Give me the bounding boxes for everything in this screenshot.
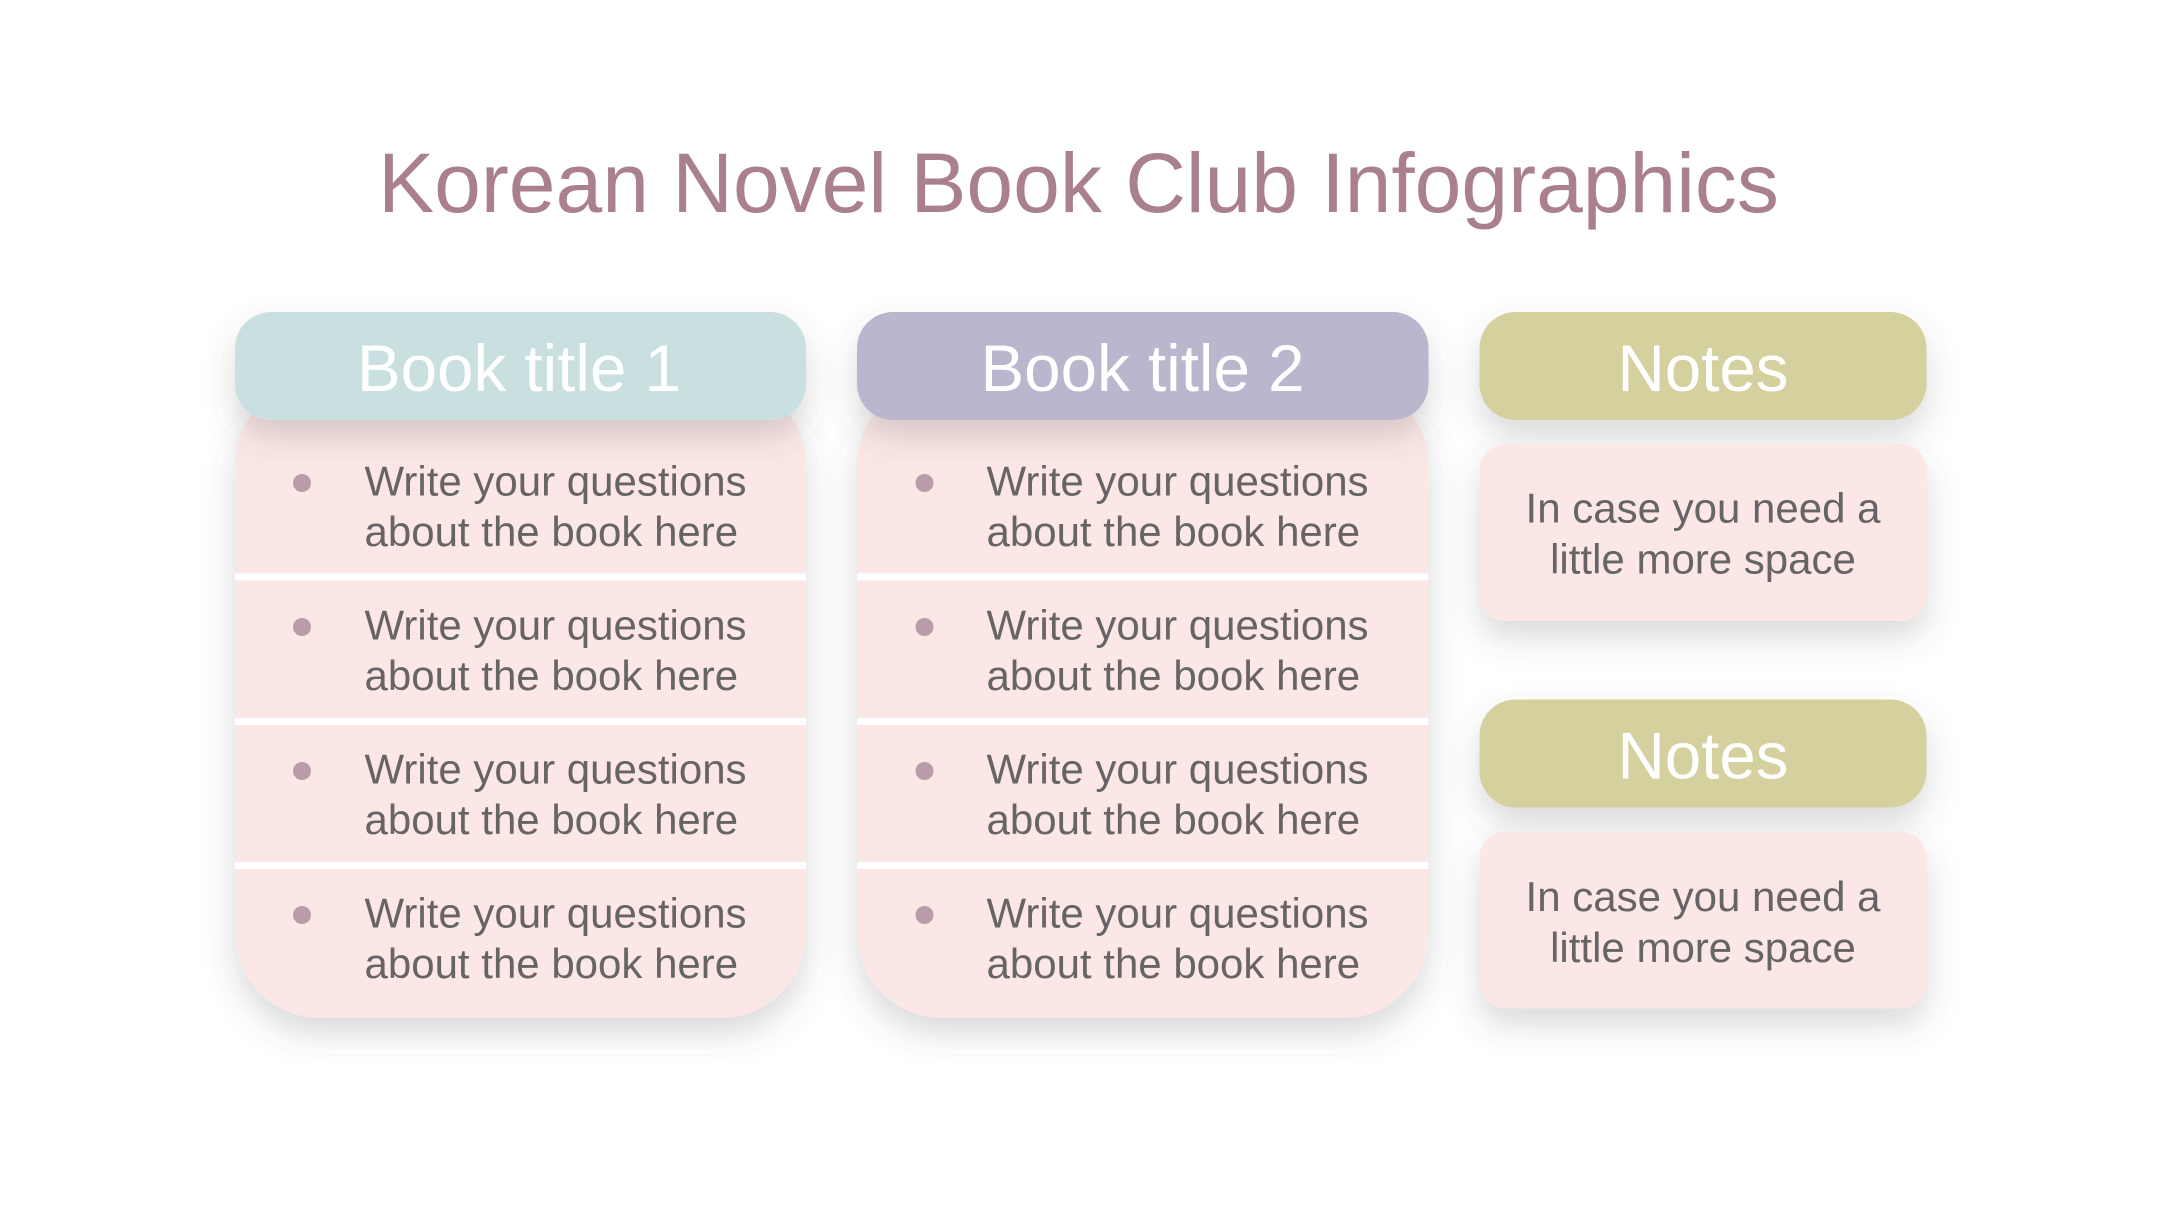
- question 2: about the book here: [364, 652, 738, 699]
- question 3: [916, 746, 1369, 843]
- question 4: about the book here: [364, 940, 738, 987]
- notes body: In case you need a: [1526, 484, 1881, 532]
- title: Korean Novel Book Club Infographics: [378, 136, 1779, 230]
- notes body: In case you need a: [1526, 873, 1881, 920]
- question 2: about the book here: [986, 652, 1360, 699]
- question 1: about the book here: [364, 508, 738, 555]
- question 4: [916, 890, 1369, 987]
- question 4: Write your questions: [364, 890, 747, 936]
- panel: notes 2: [1480, 700, 1926, 1008]
- header: book title 1: Book title 1: [357, 332, 681, 405]
- header: book title 1: [235, 312, 806, 420]
- question 2: Write your questions: [364, 602, 747, 648]
- notes header: Notes: [1617, 720, 1789, 792]
- question 1: about the book here: [986, 508, 1360, 555]
- question 2: [916, 602, 1369, 699]
- notes body: [1480, 444, 1926, 621]
- notes body: [1480, 832, 1926, 1008]
- question card background: [235, 380, 806, 1018]
- question 3: about the book here: [986, 796, 1360, 843]
- question 3: [293, 746, 747, 843]
- row dividers: [235, 574, 806, 869]
- question 1: Write your questions: [364, 458, 747, 504]
- panel: book title 2: [857, 312, 1428, 1018]
- header: book title 2: Book title 2: [980, 332, 1305, 405]
- question 4: [293, 890, 747, 987]
- question 2: [293, 602, 747, 699]
- notes body: little more space: [1550, 924, 1856, 971]
- question 1: [916, 458, 1369, 555]
- question 3: Write your questions: [986, 746, 1369, 792]
- row dividers: [857, 574, 1428, 869]
- question 4: about the book here: [986, 940, 1360, 987]
- panel: book title 1: [235, 312, 806, 1018]
- question 1: Write your questions: [986, 458, 1369, 504]
- notes header: [1480, 312, 1926, 420]
- notes header: Notes: [1617, 332, 1789, 405]
- question 3: Write your questions: [364, 746, 747, 792]
- question 3: about the book here: [364, 796, 738, 843]
- question card background: [857, 380, 1428, 1018]
- question 1: [293, 458, 747, 555]
- notes header: [1480, 700, 1926, 808]
- notes body: little more space: [1550, 536, 1856, 582]
- question 2: Write your questions: [986, 602, 1369, 648]
- question 4: Write your questions: [986, 890, 1369, 936]
- header: book title 2: [857, 312, 1428, 420]
- panel: notes 1: [1480, 312, 1926, 621]
